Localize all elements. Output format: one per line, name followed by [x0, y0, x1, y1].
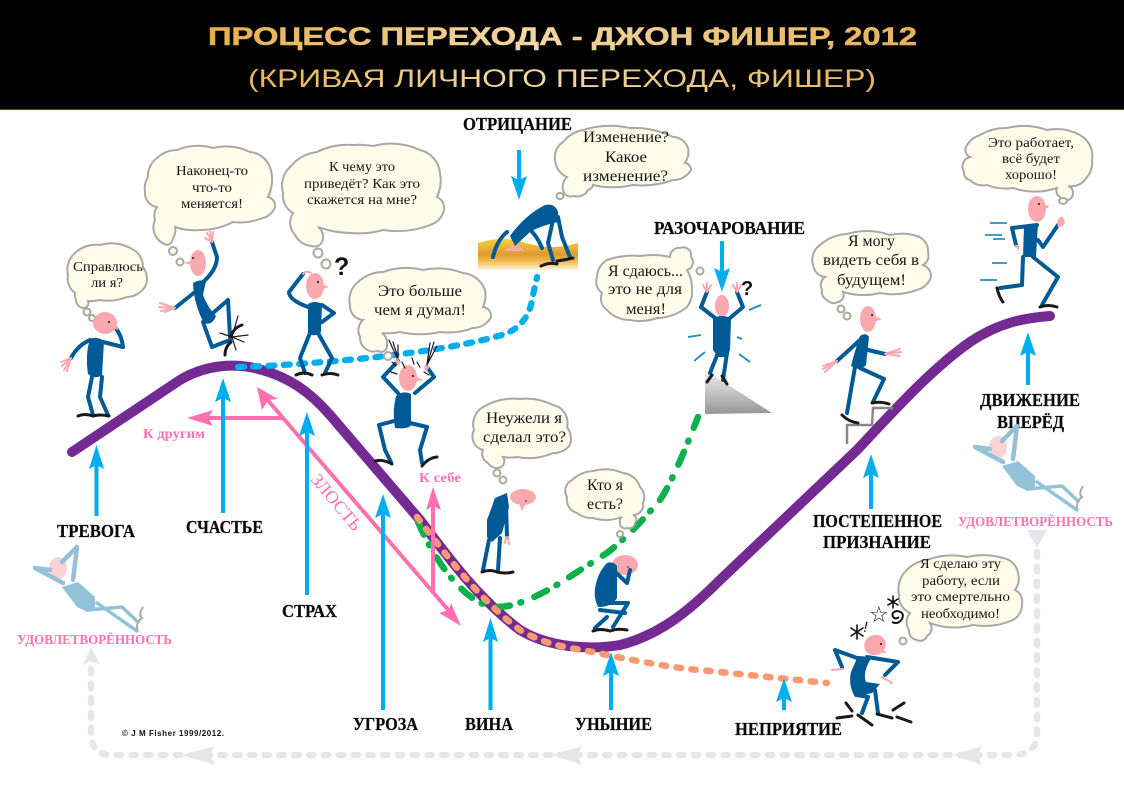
label: anxiety: ТРЕВОГА	[57, 521, 135, 541]
pink anger arrow with branches	[187, 387, 461, 626]
arrow: gradual acceptance	[863, 454, 879, 509]
bubble: what will this lead to: скажется на мне?	[307, 193, 417, 208]
bubble: change, what change: Какое	[605, 149, 647, 166]
bubble: I will do this job if I must: это смертельно	[911, 590, 1010, 605]
label: hostility: НЕПРИЯТИЕ	[735, 719, 842, 739]
arrow: disillusionment	[714, 241, 730, 292]
bubble: it works, all will be well: хорошо!	[1005, 168, 1057, 183]
question mark: fear: ?	[334, 253, 349, 281]
label: complacency left: УДОВЛЕТВОРЁННОСТЬ	[17, 632, 172, 648]
label: gradual acceptance: ПРИЗНАНИЕ	[823, 532, 931, 552]
bubble: change, what change: изменение?	[583, 168, 668, 185]
bubble: I will do this job if I must	[898, 555, 1022, 644]
question mark: disillusionment: ?	[741, 278, 753, 300]
purple transition curve	[72, 316, 1050, 647]
bubble: bigger than I thought: Это больше	[378, 283, 462, 300]
green dash-dot disillusionment path	[418, 417, 698, 607]
bubble: what will this lead to: К чему это	[329, 160, 395, 175]
arrow: hostility	[776, 678, 792, 710]
bubble: I can see myself in the future: будущем!	[837, 272, 906, 289]
bubble: it works, all will be well	[962, 126, 1092, 204]
bubble: I will do this job if I must: необходимо!	[921, 607, 1000, 622]
label: to self: К себе	[419, 471, 461, 486]
bubble: did I really do this: сделал это?	[483, 429, 566, 446]
bubble: I give up: это не для	[608, 281, 683, 298]
bubble: bigger than I thought: чем я думал!	[374, 302, 466, 319]
bubble: change, what change: Изменение?	[583, 129, 669, 146]
figure: moving forward, running	[980, 196, 1065, 307]
figure: disillusionment, arms raised on slope	[688, 283, 772, 414]
label: fear: СТРАХ	[282, 601, 337, 621]
label: threat: УГРОЗА	[353, 714, 418, 734]
bubble: who am I: есть?	[587, 496, 623, 513]
label: to others: К другим	[143, 427, 205, 442]
figure: threat, hands on head	[375, 340, 437, 466]
label: anger: ЗЛОСТЬ	[307, 470, 366, 535]
blue dashed denial path	[238, 277, 537, 367]
arrow: guilt	[483, 618, 498, 710]
bubble: did I really do this	[472, 399, 571, 484]
bubble: what will this lead to: приведёт? Как это	[304, 177, 420, 192]
arrow: threat	[375, 494, 391, 710]
figure: denial, head in the sand	[478, 205, 578, 270]
figure: complacency left	[35, 547, 143, 631]
symbols: swearing above head	[851, 596, 903, 639]
symbols: swearing above head: !	[862, 619, 869, 636]
bubble: finally something changes: что-то	[192, 181, 232, 196]
bubble: did I really do this: Неужели я	[486, 410, 563, 427]
figure: anxiety	[61, 312, 123, 416]
label: complacency right: УДОВЛЕТВОРЁННОСТЬ	[958, 514, 1113, 530]
bubble: finally something changes: Наконец-то	[176, 164, 248, 179]
grey return loop: dashed path with arrowheads	[83, 530, 1047, 765]
bubble: I will do this job if I must: Я сделаю эту	[920, 557, 1001, 572]
figure: guilt, slumped	[482, 489, 536, 573]
figure: fear, scratching head	[289, 272, 338, 375]
bubble: I can see myself in the future: Я могу	[848, 233, 895, 250]
figure: gradual acceptance on stairs	[823, 306, 901, 444]
copyright: © J M Fisher 1999/2012.	[122, 729, 224, 738]
bubble: what will this lead to	[282, 144, 444, 268]
label: moving forward: ВПЕРЁД	[997, 412, 1065, 432]
label: happiness: СЧАСТЬЕ	[186, 517, 263, 537]
arrow: depression	[603, 652, 619, 710]
bubble: finally something changes	[145, 146, 275, 266]
bubble: bigger than I thought	[349, 268, 491, 360]
arrow: moving forward	[1020, 332, 1036, 385]
bubble: can I cope: Справлюсь	[73, 260, 143, 275]
bubble: finally something changes: меняется!	[181, 197, 243, 212]
bubble: can I cope	[67, 243, 147, 321]
bubble: I will do this job if I must: работу, если	[922, 574, 1001, 589]
bubble: I give up: Я сдаюсь...	[608, 263, 683, 280]
bubble: who am I: Кто я	[587, 477, 624, 494]
arrow: fear	[299, 412, 315, 595]
bubble: I can see myself in the future	[812, 231, 931, 320]
bubble: it works, all will be well: Это работает,	[988, 136, 1074, 151]
symbols: swearing above head: ☆	[869, 603, 889, 628]
title: ПРОЦЕСС ПЕРЕХОДА - ДЖОН ФИШЕР, 2012	[208, 23, 917, 51]
subtitle: (КРИВАЯ ЛИЧНОГО ПЕРЕХОДА, ФИШЕР)	[248, 65, 876, 93]
label: moving forward: ДВИЖЕНИЕ	[980, 390, 1080, 410]
arrow: anxiety	[89, 445, 104, 516]
label: depression: УНЫНИЕ	[575, 714, 652, 734]
figure: complacency right	[975, 426, 1083, 510]
bubble: I can see myself in the future: видеть себя в	[823, 252, 919, 269]
bubble: it works, all will be well: всё будет	[1002, 152, 1060, 167]
label: denial: ОТРИЦАНИЕ	[463, 114, 572, 134]
bubble: can I cope: ли я?	[91, 276, 123, 291]
figure: depression, crouching	[593, 555, 638, 631]
bubble: I give up: меня!	[626, 301, 666, 318]
bubble: change, what change	[555, 126, 691, 199]
arrow: happiness	[215, 378, 231, 513]
header band	[0, 0, 1124, 110]
label: disillusionment: РАЗОЧАРОВАНИЕ	[654, 218, 805, 238]
label: guilt: ВИНА	[465, 714, 513, 734]
orange dashed hostility path	[417, 517, 827, 683]
bubble: who am I	[565, 469, 644, 537]
figure: hostility	[832, 631, 911, 725]
label: gradual acceptance: ПОСТЕПЕННОЕ	[813, 511, 942, 531]
bubble: I give up	[596, 247, 704, 321]
figure: happiness, jumping	[159, 231, 248, 355]
arrow: denial	[511, 150, 527, 200]
